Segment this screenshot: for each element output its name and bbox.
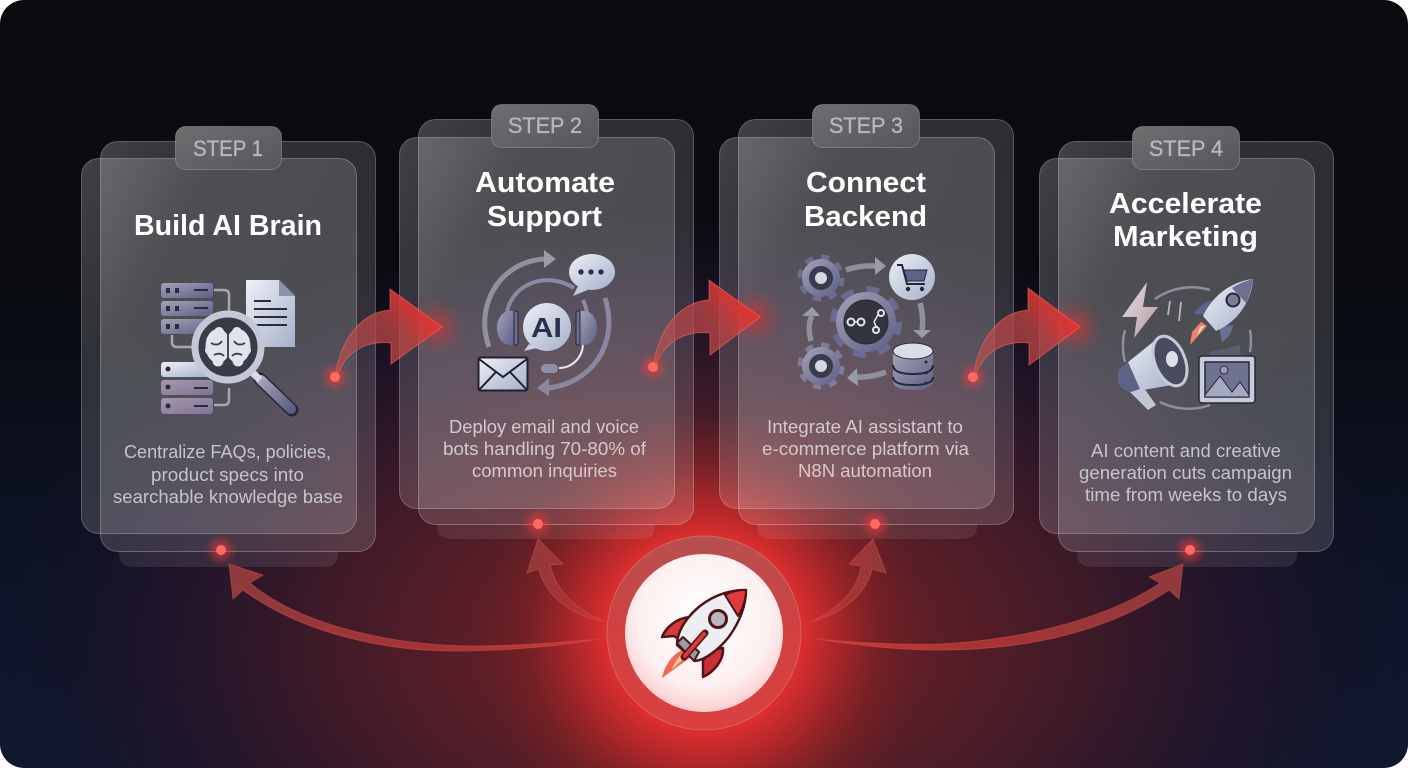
step 4 description <box>1079 441 1292 505</box>
step 4 description: AI content and creative <box>1091 441 1281 461</box>
step 4 heading: Marketing <box>1113 221 1258 253</box>
connector dots on card bases <box>210 513 1201 561</box>
arrow: step 2 to step 3 <box>643 280 770 377</box>
step 2 description: common inquiries <box>472 461 617 481</box>
icon: marketing megaphone and rocket <box>1118 279 1255 410</box>
icon: rocket <box>662 590 746 678</box>
step 2 badge <box>492 104 598 148</box>
arrow: step 3 to step 4 <box>963 288 1090 387</box>
step 2 heading: Automate <box>475 167 615 199</box>
step 4 heading: Accelerate <box>1109 188 1262 220</box>
step 2 heading <box>475 167 615 233</box>
panel: step 4 <box>1040 126 1334 567</box>
step 3 description: N8N automation <box>798 461 932 481</box>
step 4 heading <box>1109 188 1262 253</box>
step 2 description <box>443 417 647 481</box>
step 1 description: searchable knowledge base <box>113 487 343 507</box>
arrow: hub to step 1 <box>229 564 600 651</box>
step 3 badge <box>812 104 920 148</box>
step 4 description: generation cuts campaign <box>1079 463 1292 483</box>
panel: step 2 <box>400 104 694 539</box>
icon: AI support headset <box>478 250 615 396</box>
step 3 heading <box>804 167 927 233</box>
step 2 description: bots handling 70-80% of <box>443 439 647 459</box>
step 4 description: time from weeks to days <box>1085 485 1287 505</box>
step 4 badge: STEP 4 <box>1149 136 1223 161</box>
panel: step 3 <box>720 104 1014 539</box>
central rocket hub <box>604 533 804 733</box>
icon: backend gears with cart and database <box>801 254 935 390</box>
step 2 badge: STEP 2 <box>508 113 582 138</box>
step 1 description: product specs into <box>151 465 304 485</box>
step 3 description: e-commerce platform via <box>762 439 970 459</box>
panel: step 1 <box>82 126 376 567</box>
step 2 description: Deploy email and voice <box>449 417 639 437</box>
step 3 heading: Backend <box>804 201 927 233</box>
step 3 badge: STEP 3 <box>829 113 903 138</box>
step 3 description: Integrate AI assistant to <box>767 417 963 437</box>
arrow: hub to step 3 <box>810 539 886 622</box>
step 1 badge: STEP 1 <box>193 136 263 161</box>
step 3 description <box>762 417 970 481</box>
step 1 badge <box>176 126 282 170</box>
step 2 heading: Support <box>487 201 603 233</box>
arrow: hub to step 4 <box>817 564 1183 650</box>
step 1 description <box>113 442 343 507</box>
icon: knowledge base with brain magnifier <box>161 280 295 414</box>
step 3 heading: Connect <box>806 167 927 199</box>
arrow: step 1 to step 2 <box>325 289 452 387</box>
step 4 badge <box>1132 126 1240 170</box>
icon: AI support headset: AI <box>531 312 562 343</box>
step 1 heading: Build AI Brain <box>134 210 322 242</box>
step 1 description: Centralize FAQs, policies, <box>124 442 331 462</box>
arrow: hub to step 2 <box>527 539 605 622</box>
